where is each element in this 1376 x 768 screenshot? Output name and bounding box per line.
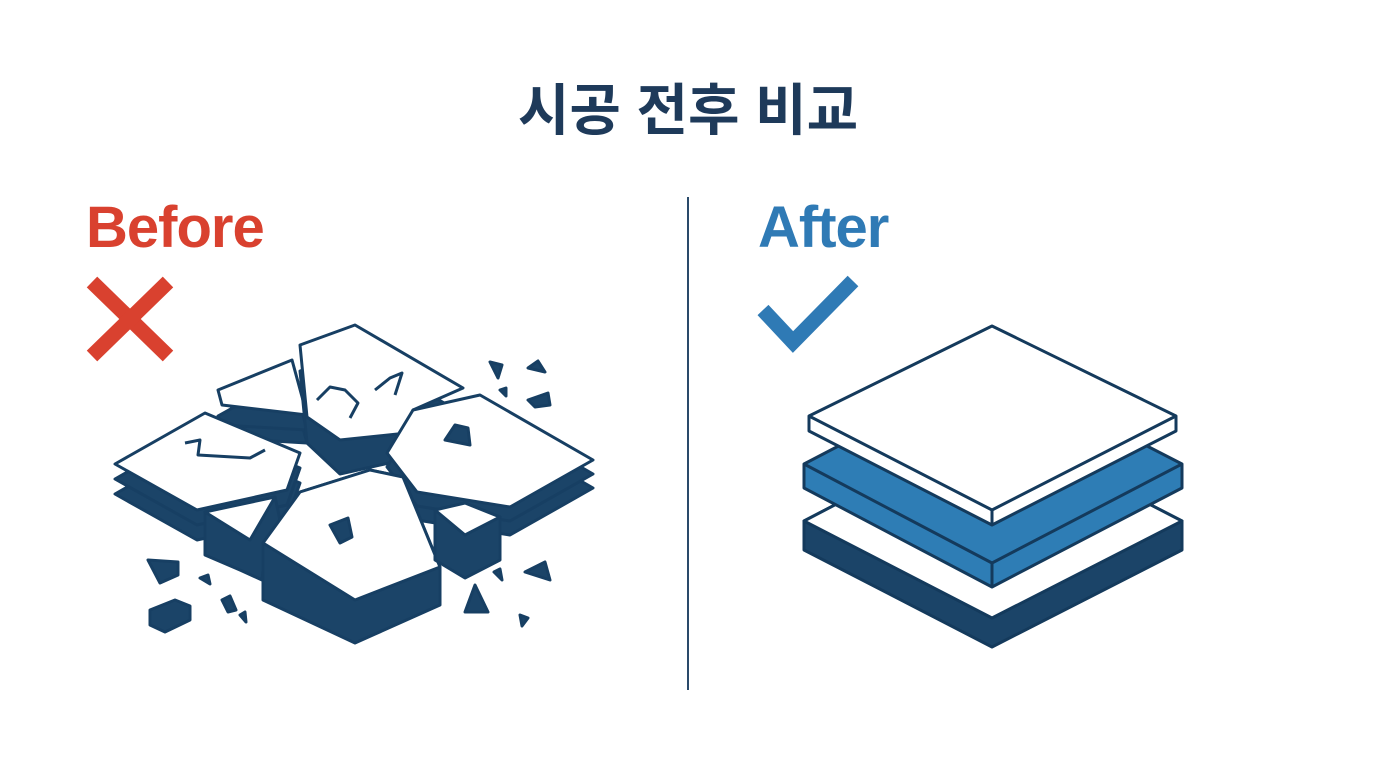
piece right front chunk xyxy=(435,503,500,578)
icon: red X xyxy=(92,282,168,356)
top layer (white finish) xyxy=(809,326,1176,525)
icon: blue check xyxy=(763,281,853,342)
heading: Before: Before xyxy=(86,195,264,260)
heading: After: After xyxy=(758,195,888,260)
divider line xyxy=(687,197,689,690)
piece C xyxy=(115,413,300,540)
illustration: cracked concrete slab xyxy=(115,325,593,643)
piece D xyxy=(387,395,593,535)
bottom layer (dark base) xyxy=(804,423,1182,647)
piece A xyxy=(300,325,463,474)
piece E xyxy=(263,470,440,643)
piece left front chunk xyxy=(205,497,280,580)
middle layer (blue membrane) xyxy=(804,366,1182,587)
illustration: layered flooring xyxy=(804,326,1182,647)
piece B xyxy=(218,360,307,443)
debris xyxy=(148,361,550,632)
title: 시공 전후 비교 xyxy=(518,79,858,142)
